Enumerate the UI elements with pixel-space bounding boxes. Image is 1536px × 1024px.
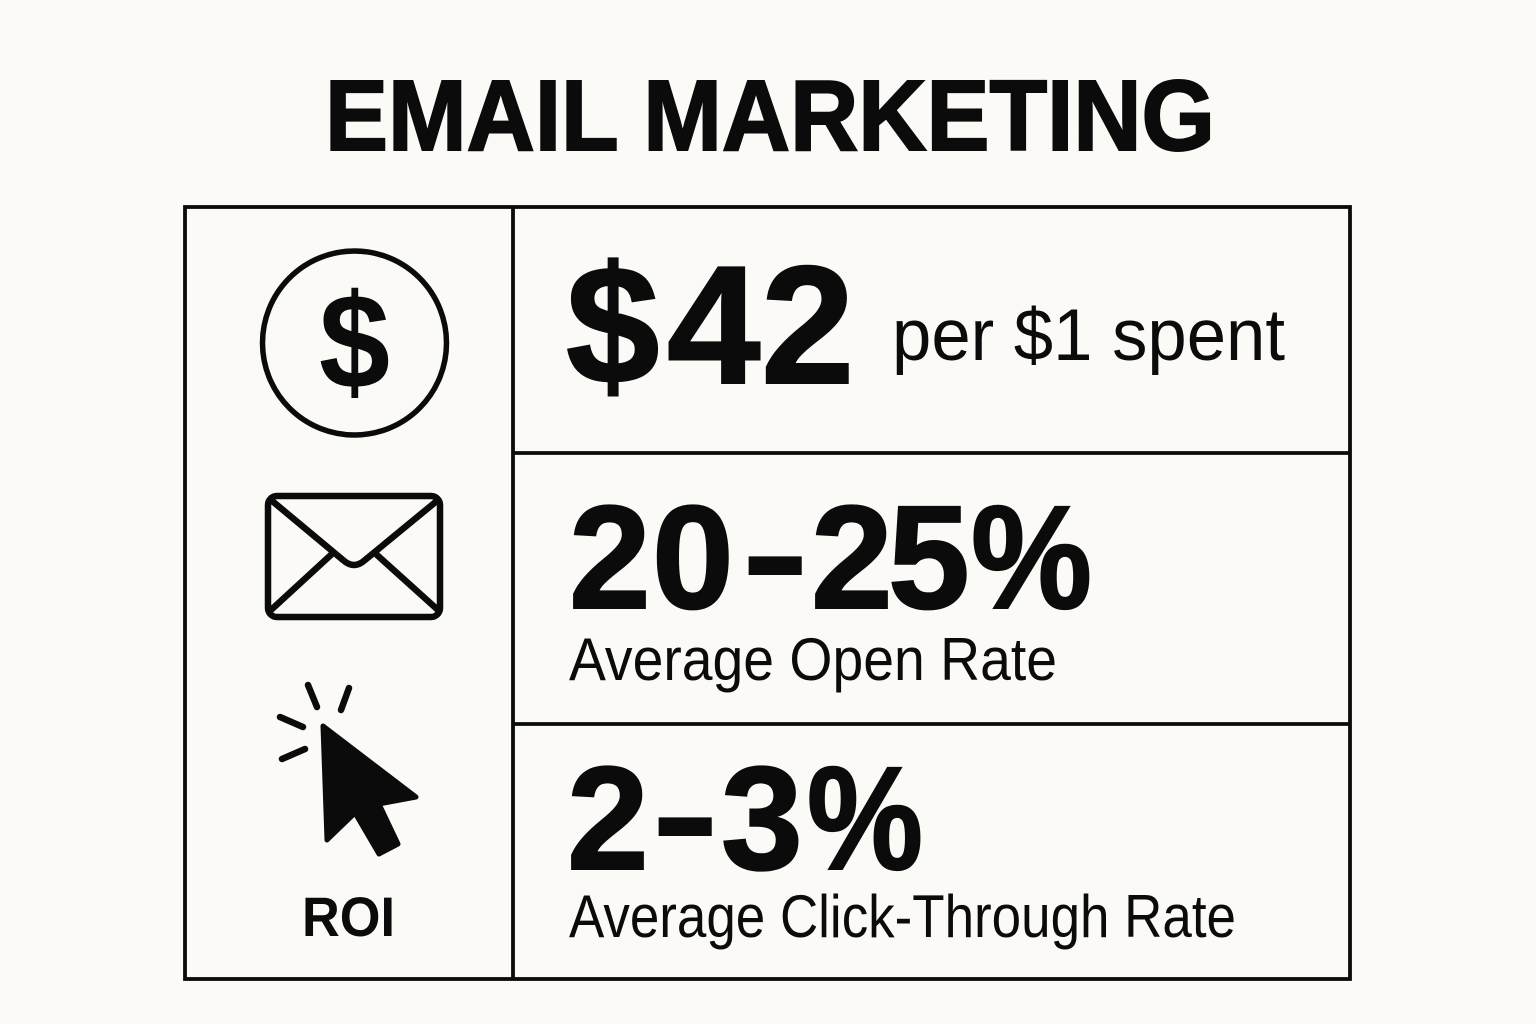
stat: open rate: –: [751, 511, 799, 608]
stat: $42 per $1 spent: per $1 spent: [892, 295, 1285, 376]
stat: open rate: 25: [811, 476, 970, 640]
icon: dollar coin: $: [319, 266, 390, 417]
stat: click-through rate: 3: [721, 737, 803, 901]
stat: open rate: Average Open Rate: [569, 626, 1057, 693]
stat: click-through rate: 2: [567, 737, 649, 901]
ROI label: ROI: [302, 885, 395, 948]
stat: open rate: 20: [569, 476, 734, 640]
stat: click-through rate: [567, 737, 1236, 950]
icon: dollar coin: [262, 251, 446, 435]
stat: click-through rate: –: [661, 772, 709, 869]
stat: $42 per $1 spent: [566, 231, 1285, 419]
table frame: [185, 207, 1350, 979]
stat: click-through rate: %: [807, 737, 923, 901]
stat: open rate: %: [971, 476, 1092, 640]
title: EMAIL MARKETING: [325, 60, 1215, 172]
stat: click-through rate: Average Click-Through Rate: [569, 883, 1236, 950]
stat: $42 per $1 spent: $42: [566, 231, 854, 419]
icon: envelope: [268, 496, 440, 617]
stat: open rate: [569, 476, 1092, 693]
icon: cursor click: [280, 685, 416, 854]
